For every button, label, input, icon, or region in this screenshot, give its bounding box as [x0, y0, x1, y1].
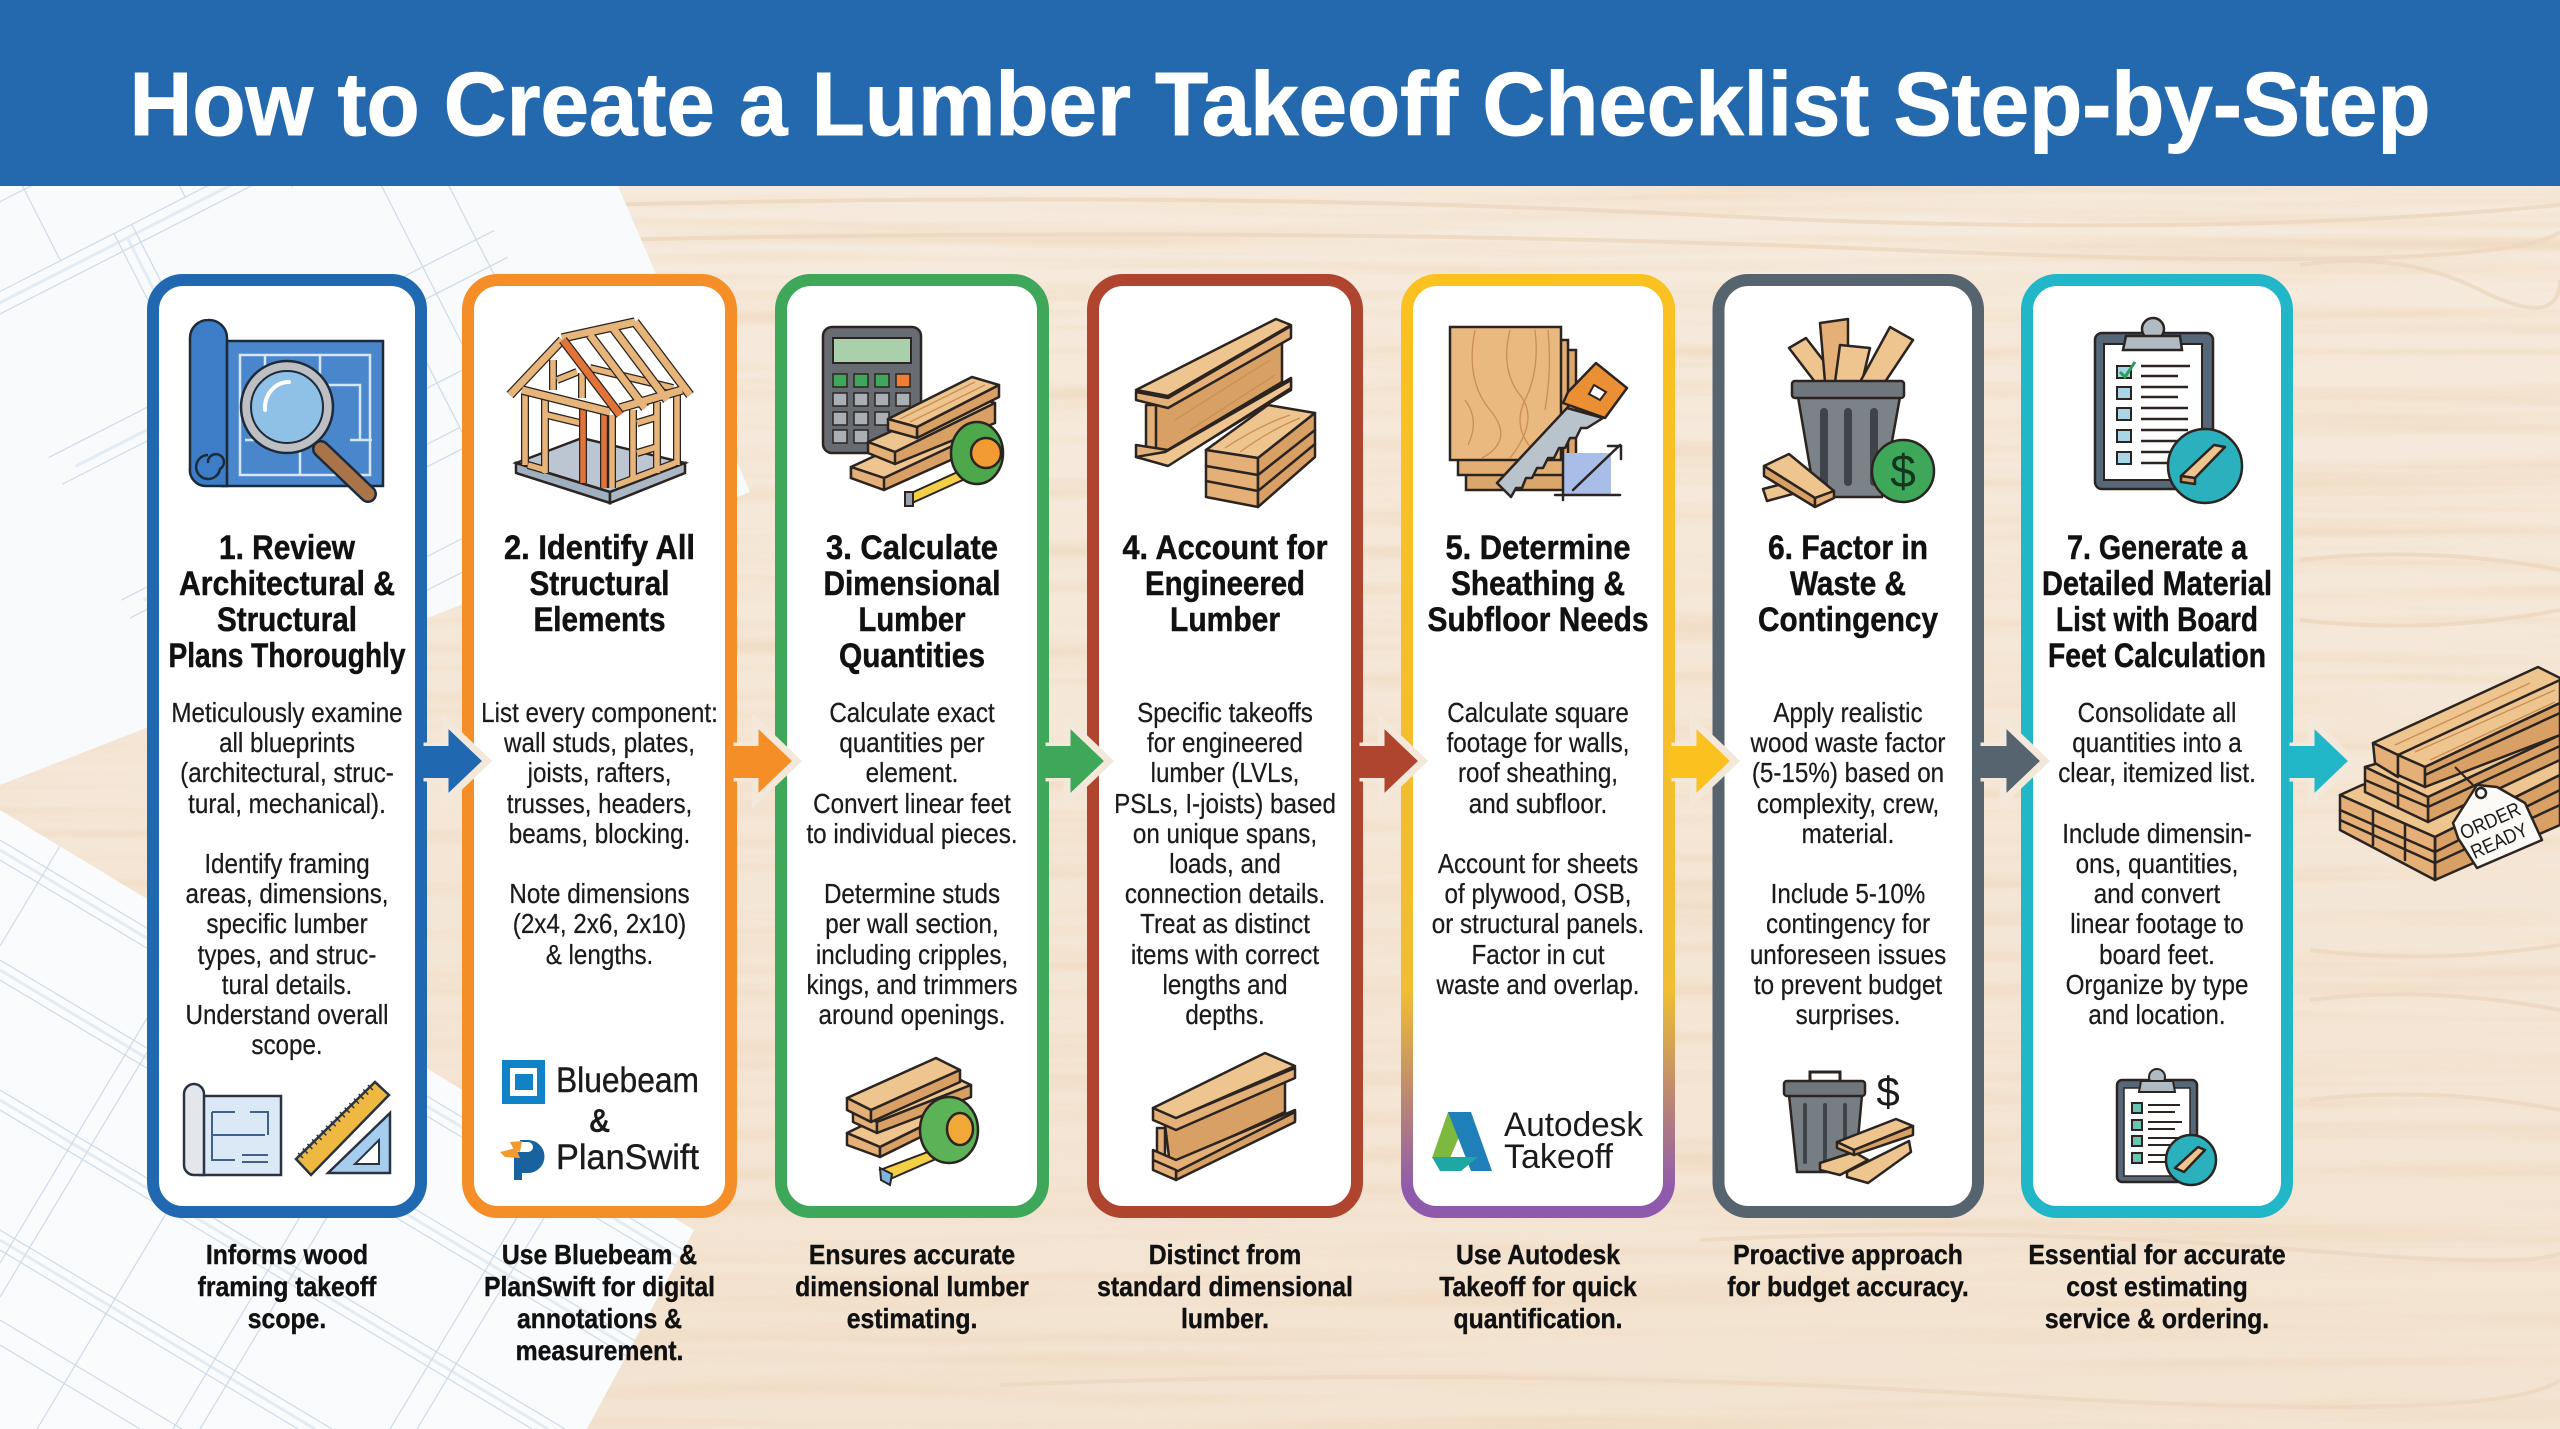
- icon: blueprint and magnifier: [190, 320, 383, 494]
- icon: small lumber and tape: [847, 1058, 978, 1185]
- body: step 3: Convert linear feet: [813, 790, 1011, 819]
- body: step 2: (2x4, 2x6, 2x10): [513, 910, 686, 939]
- heading: step 1: Plans Thoroughly: [168, 637, 406, 675]
- body: step 6: complexity, crew,: [1757, 790, 1939, 819]
- heading: step 5: [1428, 529, 1648, 639]
- heading: step 6: [1758, 529, 1938, 639]
- body: step 2: Note dimensions: [509, 880, 690, 909]
- body: step 7: and location.: [2088, 1001, 2226, 1030]
- arrow: step 5 to 6: [1668, 721, 1735, 801]
- logo: Bluebeam: [502, 1060, 699, 1104]
- body: step 7: and convert: [2094, 880, 2220, 909]
- body: step 7: clear, itemized list.: [2058, 759, 2256, 788]
- heading: step 1: Architectural &: [179, 565, 395, 603]
- body: step 2: List every component:: [481, 699, 718, 728]
- arrow: step 7 to order: [2286, 721, 2353, 801]
- body: step 7: quantities into a: [2072, 729, 2242, 758]
- body: step 3: including cripples,: [816, 941, 1008, 970]
- icon: small plan, ruler and square: [184, 1082, 390, 1175]
- heading: step 4: 4. Account for: [1122, 529, 1328, 567]
- body: step 7: Consolidate all: [2078, 699, 2236, 728]
- body: step 6: unforeseen issues: [1750, 941, 1946, 970]
- panel: step 5 sheathing: [1407, 280, 1669, 1212]
- body: step 1: tural details.: [222, 971, 352, 1000]
- arrow: step 4 to 5: [1356, 721, 1423, 801]
- body: step 1: scope.: [251, 1031, 323, 1060]
- tag text: READY: [2468, 819, 2531, 864]
- body: step 4: PSLs, I-joists) based: [1114, 790, 1336, 819]
- body: step 6: Apply realistic: [1773, 699, 1923, 728]
- caption: step 5: Takeoff for quick: [1439, 1271, 1637, 1302]
- body: step 4: connection details.: [1125, 880, 1325, 909]
- body: step 7: Organize by type: [2066, 971, 2248, 1000]
- heading: step 3: Lumber: [858, 601, 966, 639]
- body: step 6: contingency for: [1766, 910, 1930, 939]
- heading: step 4: Lumber: [1170, 601, 1280, 639]
- body: step 3: Calculate exact: [829, 699, 995, 728]
- caption: step 2: annotations &: [517, 1303, 682, 1334]
- body: step 2: trusses, headers,: [507, 790, 692, 819]
- body: step 5: and subfloor.: [1469, 790, 1607, 819]
- body: step 6: wood waste factor: [1750, 729, 1946, 758]
- icon: small trash can, lumber and dollar: [1784, 1068, 1913, 1183]
- caption: step 2: PlanSwift for digital: [484, 1271, 715, 1302]
- body: step 1: areas, dimensions,: [185, 880, 389, 909]
- tag text: ORDER: [2457, 798, 2524, 845]
- caption: step 1: Informs wood: [206, 1239, 368, 1270]
- body: step 2: wall studs, plates,: [503, 729, 695, 758]
- caption: step 4: standard dimensional: [1097, 1271, 1353, 1302]
- heading: step 5: 5. Determine: [1446, 529, 1630, 567]
- body: step 4: lumber (LVLs,: [1151, 759, 1299, 788]
- body: step 6: Include 5-10%: [1771, 880, 1925, 909]
- caption: step 6: Proactive approach: [1733, 1239, 1963, 1270]
- body: step 2: beams, blocking.: [509, 820, 690, 849]
- body: step 4: Specific takeoffs: [1137, 699, 1313, 728]
- body: step 4: on unique spans,: [1133, 820, 1317, 849]
- heading: step 3: Dimensional: [824, 565, 1000, 603]
- body: step 5: Account for sheets: [1438, 850, 1638, 879]
- body: step 7: Include dimensin-: [2062, 820, 2252, 849]
- body: step 4: depths.: [1185, 1001, 1265, 1030]
- arrow: step 3 to 4: [1042, 721, 1109, 801]
- icon: small I-joist: [1153, 1053, 1295, 1180]
- heading: step 6: Waste &: [1790, 565, 1906, 603]
- caption: step 7: cost estimating: [2066, 1271, 2248, 1302]
- caption: step 1: scope.: [248, 1303, 326, 1334]
- heading: step 7: 7. Generate a: [2067, 529, 2248, 567]
- body: step 3: Determine studs: [824, 880, 1000, 909]
- icon: clipboard checklist: [2095, 318, 2242, 503]
- body: step 2: & lengths.: [546, 941, 653, 970]
- heading: step 7: Detailed Material: [2042, 565, 2272, 603]
- icon: calculator, lumber and tape: [823, 327, 1003, 506]
- title: How to Create a Lumber Takeoff Checklist Step-by-Step: [130, 55, 2430, 155]
- body: step 2: joists, rafters,: [527, 759, 671, 788]
- panel: step 3 dimensional lumber: [781, 280, 1043, 1212]
- caption: step 6: for budget accuracy.: [1727, 1271, 1969, 1302]
- caption: step 7: service & ordering.: [2045, 1303, 2269, 1334]
- heading: step 4: [1122, 529, 1328, 639]
- logo: PlanSwift: [500, 1138, 699, 1180]
- body: step 7: board feet.: [2099, 941, 2215, 970]
- body: step 4: loads, and: [1169, 850, 1281, 879]
- logo: Autodesk Takeoff: [1432, 1106, 1644, 1176]
- logo: Bluebeam: Bluebeam: [556, 1061, 699, 1100]
- heading: step 1: [168, 529, 406, 675]
- icon: small trash can, lumber and dollar: $: [1876, 1068, 1900, 1115]
- panel: step 2 structural elements: [468, 280, 731, 1212]
- panel: step 6 waste: [1718, 280, 1978, 1212]
- caption: step 1: framing takeoff: [198, 1271, 377, 1302]
- tag text: [2457, 798, 2531, 864]
- icon: trash can with scraps and dollar: [1763, 319, 1934, 507]
- caption: step 4: Distinct from: [1149, 1239, 1301, 1270]
- heading: step 2: 2. Identify All: [504, 529, 695, 567]
- heading: step 2: Elements: [534, 601, 666, 639]
- body: step 6: (5-15%) based on: [1752, 759, 1944, 788]
- body: step 5: footage for walls,: [1447, 729, 1629, 758]
- heading: step 3: [824, 529, 1000, 675]
- body: step 5: Factor in cut: [1471, 941, 1605, 970]
- body: step 4: for engineered: [1147, 729, 1303, 758]
- body: step 5: of plywood, OSB,: [1445, 880, 1631, 909]
- heading: step 1: Structural: [217, 601, 357, 639]
- heading: step 5: Sheathing &: [1451, 565, 1625, 603]
- body: step 5: or structural panels.: [1432, 910, 1644, 939]
- body: step 3: kings, and trimmers: [806, 971, 1018, 1000]
- body: step 1: (architectural, struc-: [180, 759, 394, 788]
- heading: step 2: [504, 529, 695, 639]
- body: step 3: around openings.: [819, 1001, 1005, 1030]
- caption: step 3: estimating.: [847, 1303, 977, 1334]
- heading: step 7: List with Board: [2056, 601, 2258, 639]
- body: step 4: items with correct: [1131, 941, 1319, 970]
- body: step 3: per wall section,: [825, 910, 999, 939]
- heading: step 7: Feet Calculation: [2048, 637, 2266, 675]
- body: step 3: to individual pieces.: [806, 820, 1018, 849]
- panel: step 7 material list: [2027, 280, 2287, 1212]
- caption: step 7: Essential for accurate: [2028, 1239, 2286, 1270]
- body: step 6: to prevent budget: [1754, 971, 1942, 1000]
- logo: Autodesk Takeoff: Autodesk: [1504, 1106, 1644, 1144]
- blueprint sheet: top left: [0, 186, 750, 785]
- icon: timber house frame: [510, 322, 690, 503]
- arrow: step 6 to 7: [1977, 721, 2045, 801]
- icon: finished lumber stack with order-ready tag: [2340, 667, 2560, 880]
- body: step 4: lengths and: [1162, 971, 1288, 1000]
- body: step 1: tural, mechanical).: [188, 790, 386, 819]
- heading: step 4: Engineered: [1145, 565, 1305, 603]
- body: step 3: quantities per: [839, 729, 985, 758]
- icon: I-joist and block stack: [1136, 319, 1315, 507]
- body: step 1: Identify framing: [204, 850, 370, 879]
- body: step 1: Meticulously examine: [171, 699, 403, 728]
- heading: step 5: Subfloor Needs: [1428, 601, 1648, 639]
- arrow: step 2 to 3: [730, 721, 797, 801]
- arrow: step 1 to 2: [420, 721, 487, 801]
- body: step 5: Calculate square: [1447, 699, 1629, 728]
- heading: step 3: Quantities: [839, 637, 985, 675]
- heading: step 2: Structural: [530, 565, 670, 603]
- heading: step 1: 1. Review: [219, 529, 355, 567]
- caption: step 2: measurement.: [516, 1335, 683, 1366]
- caption: step 4: lumber.: [1181, 1303, 1269, 1334]
- body: step 6: material.: [1802, 820, 1894, 849]
- panel: step 1 review plans: [153, 280, 421, 1212]
- logo: PlanSwift: PlanSwift: [556, 1138, 699, 1177]
- body: step 7: ons, quantities,: [2076, 850, 2238, 879]
- body: step 1: all blueprints: [219, 729, 355, 758]
- logo: Autodesk Takeoff: Takeoff: [1504, 1138, 1614, 1176]
- blueprint sheet: bottom left: [0, 805, 700, 1429]
- body: step 1: specific lumber: [206, 910, 368, 939]
- body: step 3: element.: [866, 759, 958, 788]
- body: step 1: types, and struc-: [198, 941, 376, 970]
- icon: trash can with scraps and dollar: $: [1890, 445, 1916, 497]
- text: ampersand: &: [589, 1103, 610, 1139]
- caption: step 2: Use Bluebeam &: [502, 1239, 697, 1270]
- panel: step 4 engineered lumber: [1093, 280, 1357, 1212]
- body: step 5: waste and overlap.: [1436, 971, 1640, 1000]
- caption: step 5: Use Autodesk: [1456, 1239, 1620, 1270]
- body: step 7: linear footage to: [2070, 910, 2244, 939]
- heading: step 6: Contingency: [1758, 601, 1938, 639]
- body: step 5: roof sheathing,: [1458, 759, 1618, 788]
- caption: step 5: quantification.: [1453, 1303, 1623, 1334]
- caption: step 3: dimensional lumber: [795, 1271, 1029, 1302]
- heading: step 3: 3. Calculate: [826, 529, 998, 567]
- body: step 1: Understand overall: [185, 1001, 389, 1030]
- heading: step 6: 6. Factor in: [1768, 529, 1928, 567]
- caption: step 3: Ensures accurate: [809, 1239, 1015, 1270]
- heading: step 7: [2042, 529, 2272, 675]
- title bar: [0, 0, 2560, 186]
- body: step 6: surprises.: [1796, 1001, 1900, 1030]
- icon: small clipboard checklist: [2117, 1069, 2216, 1185]
- icon: plywood, saw and area square: [1450, 327, 1627, 500]
- body: step 4: Treat as distinct: [1140, 910, 1310, 939]
